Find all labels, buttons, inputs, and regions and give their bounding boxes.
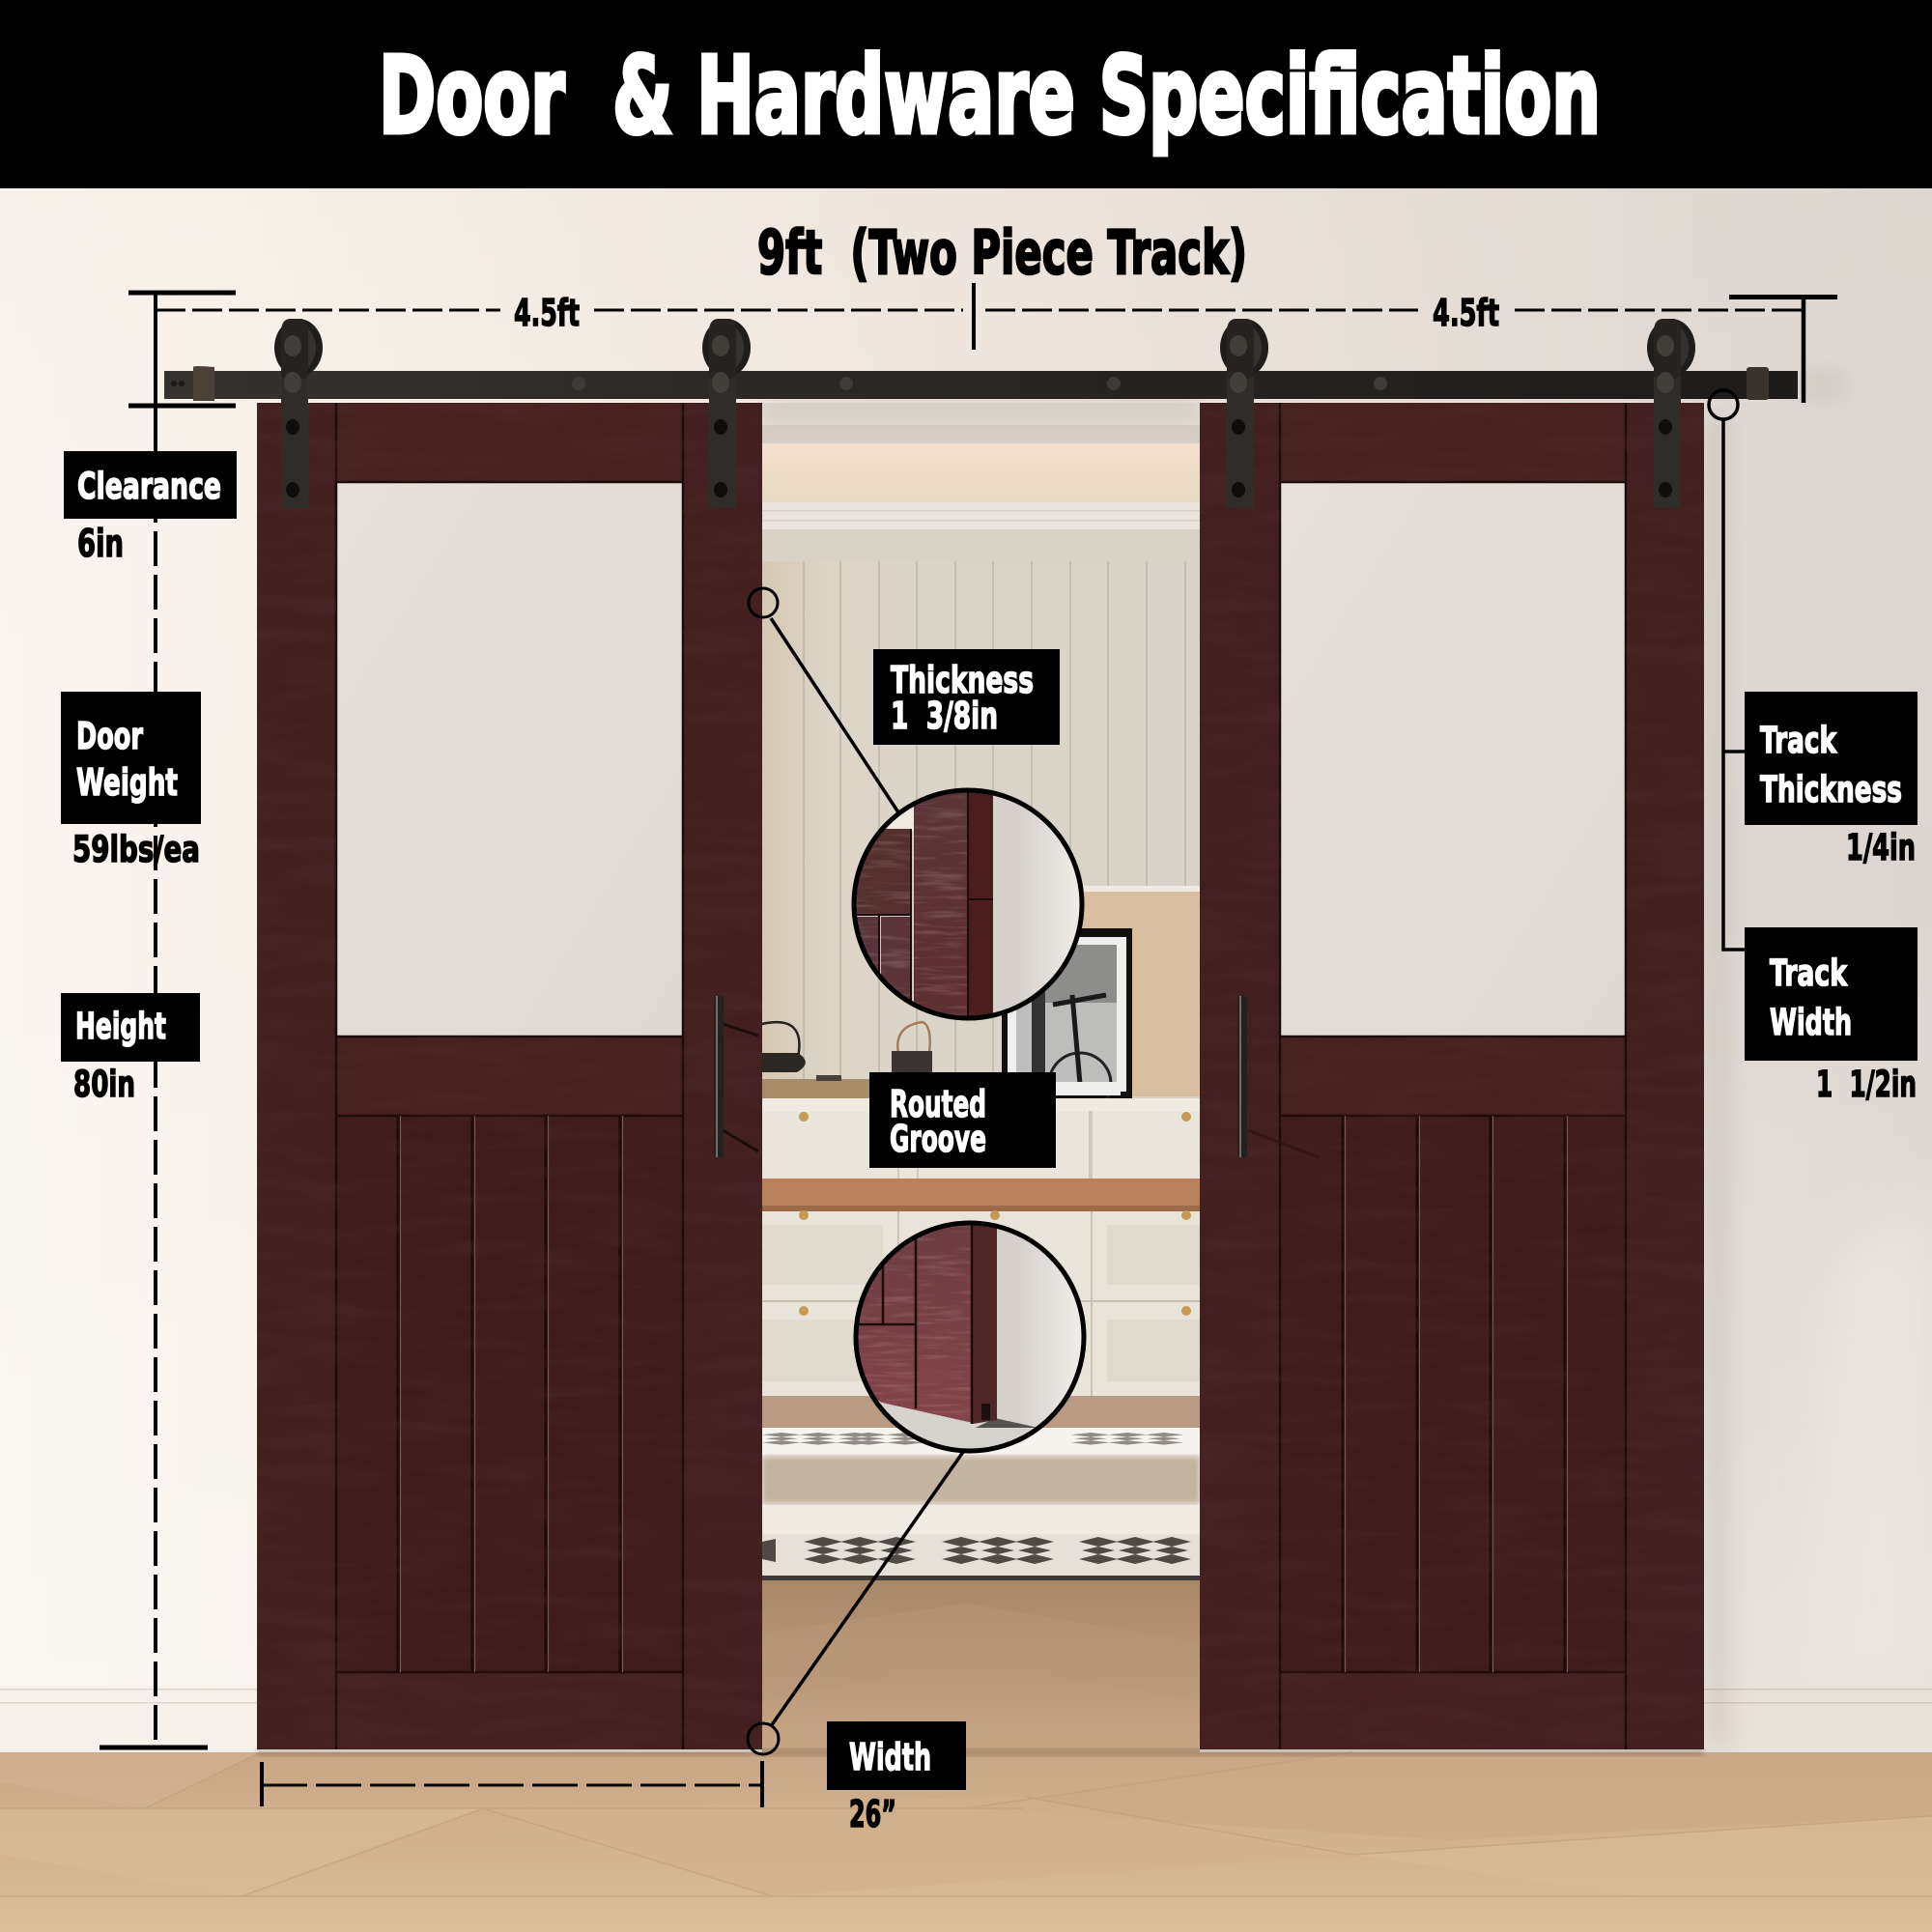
left door <box>257 403 762 1749</box>
callout: thickness: 1 3/8in <box>891 695 998 737</box>
window glass, left door <box>336 482 683 1037</box>
callout: door weight <box>61 692 201 870</box>
right door <box>1200 403 1704 1749</box>
callout: track thickness <box>1745 692 1918 868</box>
magnifier: door thickness detail <box>850 787 1092 1023</box>
callout: door weight: Door <box>76 715 143 757</box>
interior room seen through the opening <box>762 403 1200 1580</box>
framed bicycle picture <box>1002 928 1132 1115</box>
header bar <box>0 0 1932 188</box>
window glass, right door <box>1280 482 1626 1037</box>
track stops <box>193 366 214 401</box>
callout: routed groove: Routed <box>890 1083 986 1125</box>
callout: clearance <box>64 451 237 566</box>
upper cabinets <box>762 1098 1200 1179</box>
callout: track width: Width <box>1770 1002 1852 1043</box>
wood grain overlay <box>257 403 1704 1749</box>
callout: routed groove: Groove <box>890 1118 986 1160</box>
wood countertop <box>762 1179 1200 1211</box>
callout: door weight: Weight <box>76 761 178 804</box>
callout: door weight: 59lbs/ea <box>72 829 200 870</box>
track hangers <box>274 319 1695 508</box>
callout: clearance: 6in <box>77 523 124 566</box>
callout: height: 80in <box>73 1064 135 1105</box>
track length heading: 9ft (Two Piece Track) <box>757 217 1247 288</box>
callout: width <box>827 1721 966 1835</box>
top dimension lines <box>128 283 1837 444</box>
lower cabinets <box>762 1211 1200 1401</box>
callout: thickness <box>873 649 1060 745</box>
right 4.5ft label: 4.5ft <box>1433 292 1499 334</box>
backsplash <box>1072 892 1200 1096</box>
callout: track width: Track <box>1770 952 1848 994</box>
height dimension line <box>99 444 208 1747</box>
baseboard <box>0 1686 1932 1752</box>
callout: height: Height <box>75 1006 166 1047</box>
floor <box>0 1580 1932 1932</box>
callout: width: Width <box>849 1736 931 1778</box>
barn door track <box>164 366 1798 401</box>
kettles and tray <box>762 1022 932 1098</box>
width dimension line <box>262 1761 762 1807</box>
wall shadows from doors and track <box>762 372 1846 1748</box>
callout: clearance: Clearance <box>77 466 221 507</box>
callout: width: 26” <box>849 1793 896 1835</box>
callout: height <box>61 993 200 1105</box>
door handles <box>714 996 1319 1157</box>
left 4.5ft label: 4.5ft <box>514 292 580 334</box>
rug <box>762 1428 1200 1580</box>
callout: track thickness: Track <box>1760 720 1837 761</box>
magnifier: routed groove detail <box>850 1217 1092 1459</box>
callout: routed groove <box>869 1072 1056 1168</box>
leader lines to magnifiers <box>748 588 963 1754</box>
room floor <box>762 1396 1200 1428</box>
callout: thickness: Thickness <box>891 659 1034 701</box>
callout: track width <box>1745 927 1918 1105</box>
track leader line <box>1709 390 1745 950</box>
